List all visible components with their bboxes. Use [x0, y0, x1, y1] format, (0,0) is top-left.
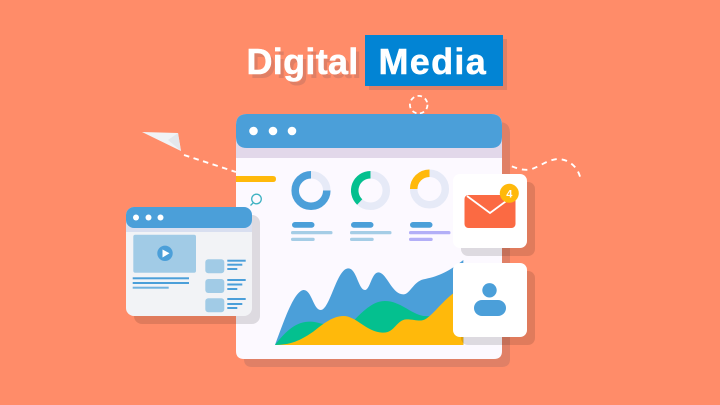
video thumbnail: [133, 235, 196, 273]
donut chart 3: [414, 173, 445, 205]
donut label 2: [350, 222, 392, 241]
donut chart 2: [355, 175, 386, 206]
header under band: [236, 140, 502, 158]
area: blue series: [275, 260, 463, 345]
yellow menu bar: [236, 176, 276, 182]
header dots: [249, 127, 296, 135]
window header bar: [236, 114, 502, 148]
notification badge: 4: [506, 188, 513, 200]
small window header: [126, 207, 252, 228]
list item 3: [205, 298, 246, 312]
icon: person: [474, 283, 506, 316]
title: [246, 35, 507, 90]
donut label 1: [291, 222, 332, 241]
panel: small video window: [126, 207, 252, 316]
panel: email card: [453, 174, 527, 248]
small window dots: [133, 214, 164, 220]
email card shadow: [461, 182, 535, 256]
title word: Digital: Digital: [250, 45, 362, 86]
icon: paper plane: [142, 132, 181, 151]
icon: search: [250, 194, 261, 206]
small window band: [126, 222, 252, 232]
donut label 3: [409, 222, 450, 241]
main window shadow: [244, 122, 510, 367]
title word: Media on blue box: [365, 35, 507, 90]
panel: person card: [453, 263, 527, 337]
donut chart 1: [295, 175, 327, 206]
icon: play button: [157, 246, 173, 261]
person card shadow: [461, 271, 535, 345]
list item 2: [205, 279, 246, 293]
area chart: [275, 260, 463, 345]
title word: Media on blue box: Media: [378, 41, 487, 82]
panel: main dashboard window: [236, 114, 502, 359]
small window shadow: [134, 215, 260, 324]
dashed flight path left: [184, 155, 236, 172]
area: yellow series: [275, 287, 463, 345]
title word: Digital: Digital: [246, 41, 359, 82]
icon: dashed circle: [410, 96, 428, 113]
video caption lines: [133, 277, 189, 289]
dashed flight path right: [502, 159, 581, 181]
list item 1: [205, 259, 246, 273]
area: green series: [275, 301, 440, 345]
icon: envelope: [464, 195, 516, 228]
